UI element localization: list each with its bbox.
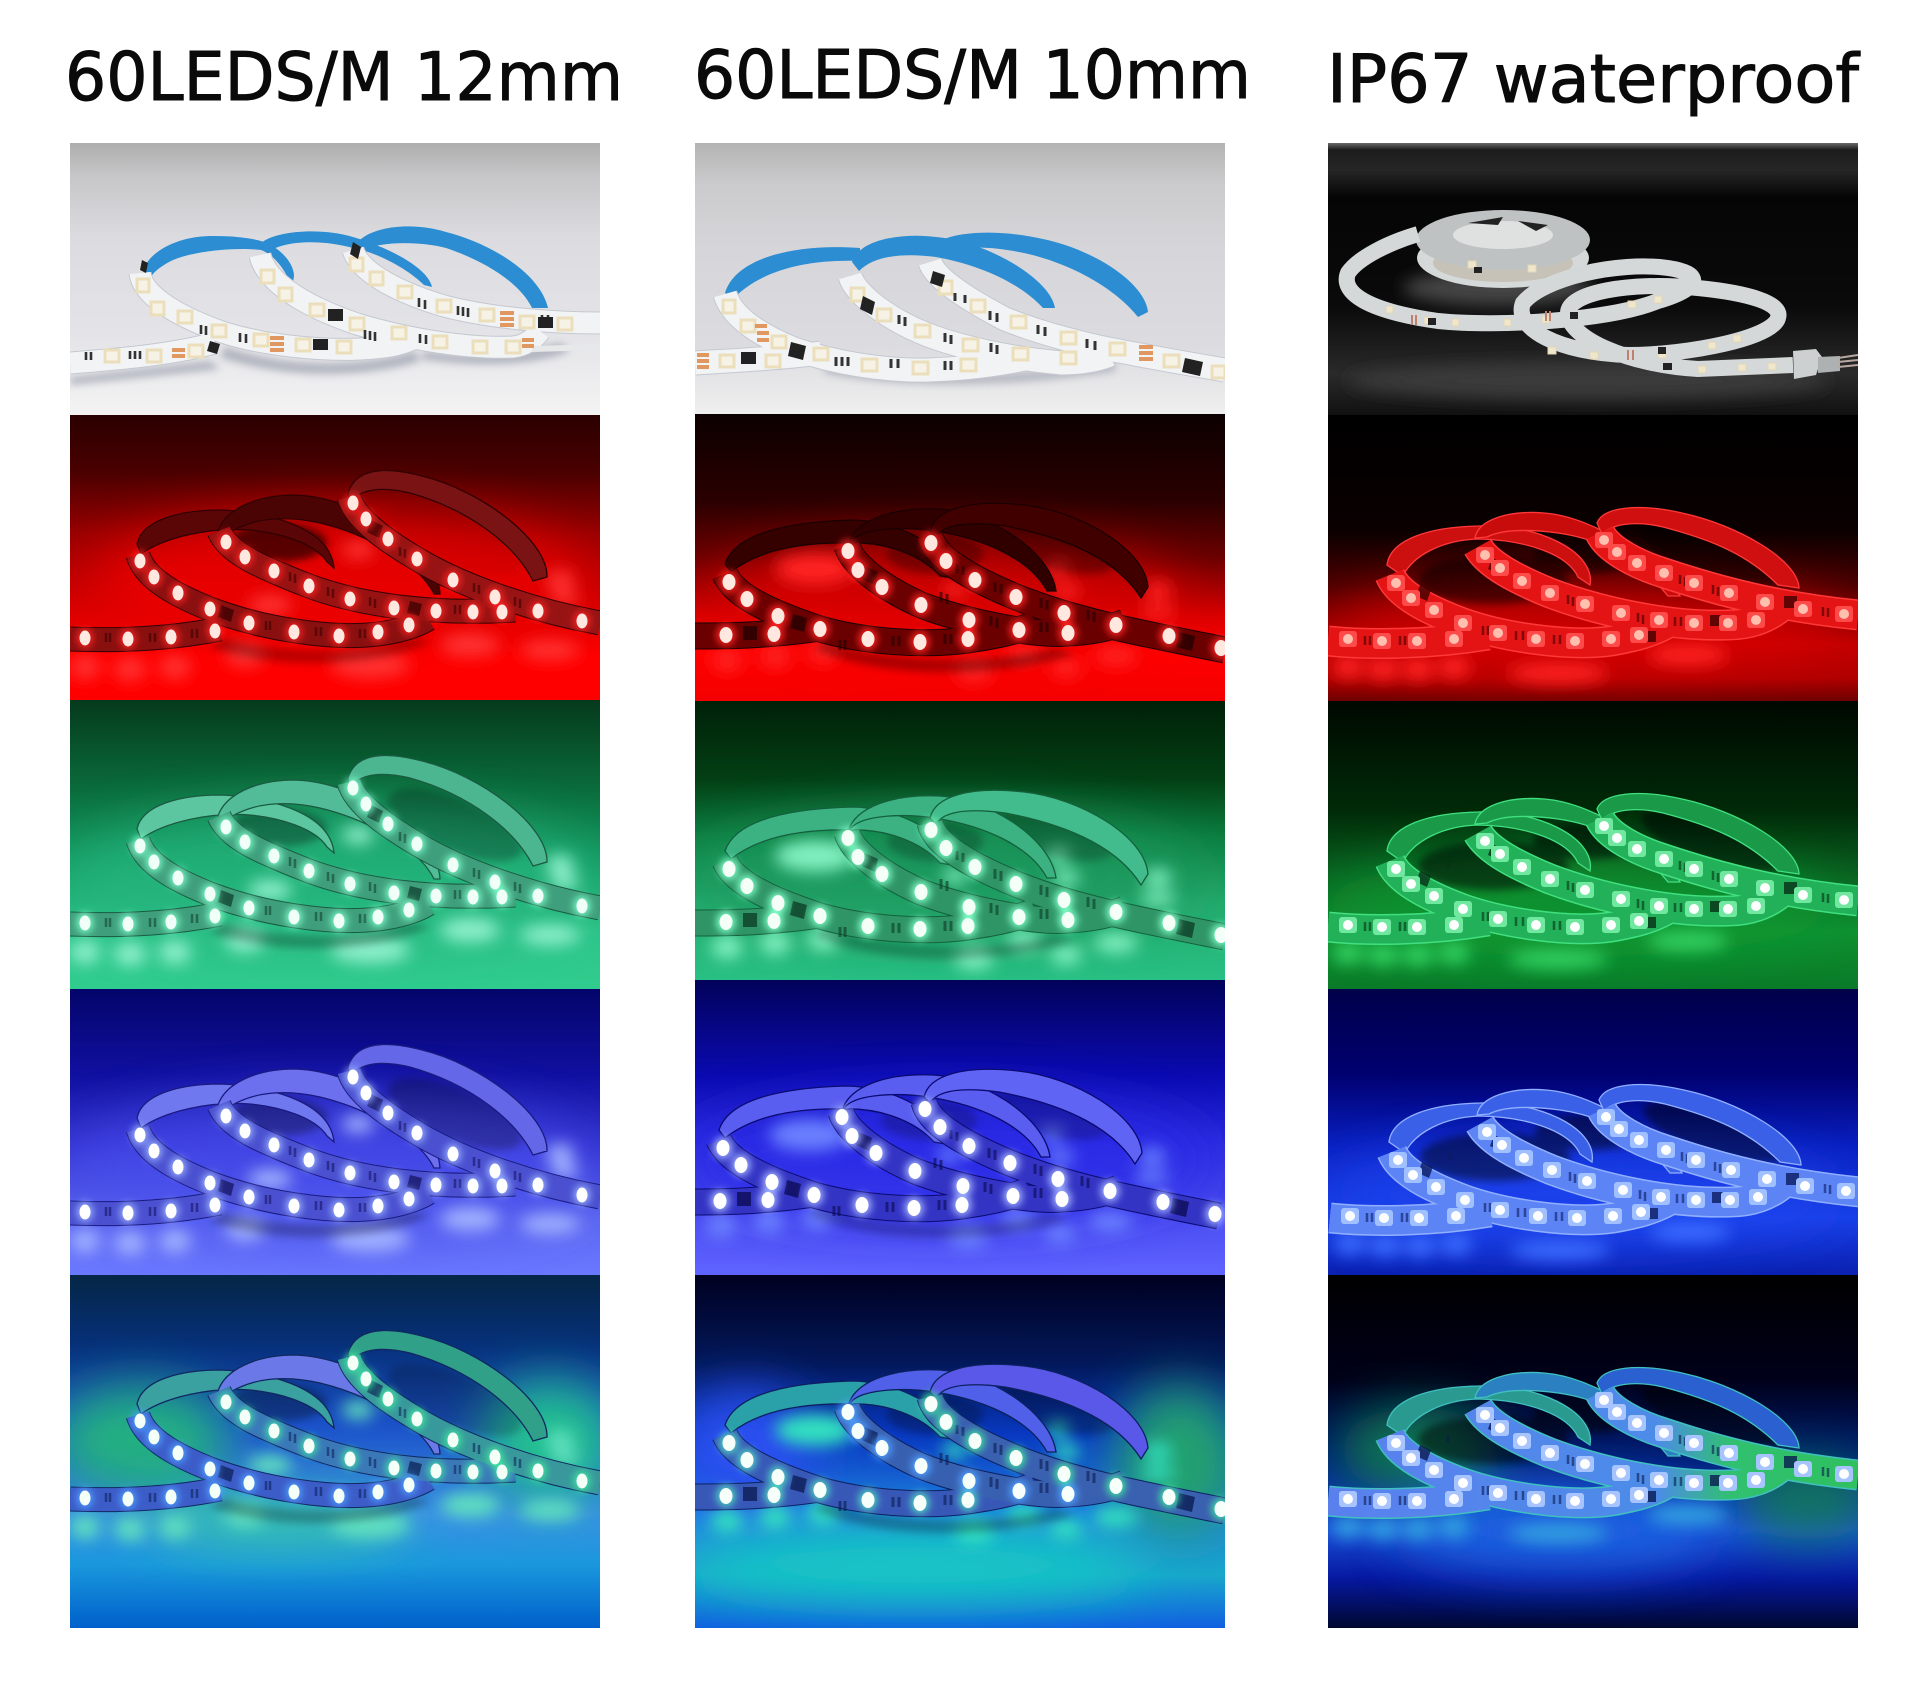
heading: IP67 waterproof: IP67 waterproof xyxy=(1327,40,1860,118)
LED chips xyxy=(105,258,572,362)
panel: 10mm strip blue xyxy=(695,980,1225,1275)
panel: IP67 strip green xyxy=(1328,701,1858,989)
connector and wires xyxy=(1793,349,1858,379)
blue adhesive backing bands xyxy=(143,226,548,308)
heading: 60LEDS/M 10mm: 60LEDS/M 10mm xyxy=(694,36,1251,114)
LED chips xyxy=(720,281,1225,378)
resistors, ICs, solder pads xyxy=(836,293,1095,370)
panel: 12mm strip blue xyxy=(70,989,600,1275)
LED chips xyxy=(1386,261,1776,373)
panel: 10mm strip red xyxy=(695,414,1225,701)
heading: 60LEDS/M 12mm: 60LEDS/M 12mm xyxy=(65,38,623,116)
resistors, ICs, solder pads xyxy=(86,298,548,360)
white flexible strip xyxy=(695,262,1225,370)
panel: 12mm strip green xyxy=(70,700,600,989)
panel: 12mm strip mixed blue and green xyxy=(70,1275,600,1628)
white flexible strip xyxy=(70,250,600,363)
tape reel xyxy=(1416,210,1590,288)
waterproof strip xyxy=(1347,234,1793,369)
panel: IP67 strip blue xyxy=(1328,989,1858,1275)
panel: 12mm strip red xyxy=(70,415,600,700)
blue adhesive backing bands xyxy=(725,233,1148,317)
panel: 12mm strip unlit on white xyxy=(70,143,600,415)
panel: IP67 strip unlit on black xyxy=(1328,143,1858,415)
panel: 10mm strip unlit on white xyxy=(695,143,1225,414)
panel: IP67 strip mixed blue and green xyxy=(1328,1275,1858,1628)
panel: 10mm strip mixed blue and green xyxy=(695,1275,1225,1628)
panel: 10mm strip green xyxy=(695,701,1225,980)
ICs and pads xyxy=(1428,267,1672,370)
panel: IP67 strip red xyxy=(1328,415,1858,701)
